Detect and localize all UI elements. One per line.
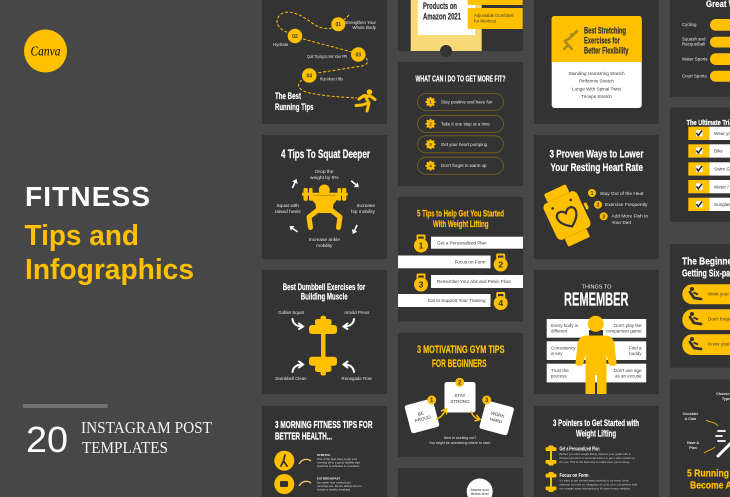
phone bbox=[411, 0, 482, 51]
step 02: 02 bbox=[292, 34, 298, 40]
panel title bbox=[275, 91, 314, 113]
pill 1: 1 bbox=[429, 100, 432, 105]
panel: triathlon checklist bbox=[670, 108, 730, 222]
card: stay strong: STAY bbox=[454, 393, 466, 398]
title bbox=[283, 282, 365, 302]
pill 2 bbox=[418, 115, 504, 132]
product tags: Adjustable Dumbbell bbox=[474, 13, 513, 18]
step labels: Strengthen Your bbox=[344, 20, 377, 25]
pill 3: Get your heart pumping bbox=[441, 142, 488, 147]
heading: Tips and Infographics bbox=[24, 220, 194, 286]
icon: Canva logo bbox=[24, 30, 67, 72]
step labels: Quit Trying to Set Your PR bbox=[307, 54, 347, 59]
labels bbox=[683, 392, 730, 450]
row 3 bbox=[414, 274, 523, 292]
number badges: 2 bbox=[458, 380, 462, 386]
labels: mobility bbox=[316, 243, 333, 249]
pointer 1: for you. This is the best way to make sure you're doing bbox=[560, 460, 630, 464]
labels: Racquetball bbox=[682, 42, 705, 46]
dashed route bbox=[277, 12, 368, 98]
row text: Don't use age bbox=[614, 368, 642, 373]
card: work hard bbox=[479, 400, 514, 436]
labels: raised heels bbox=[275, 209, 301, 215]
number badges: 1 bbox=[430, 398, 434, 404]
pointer 2: It's easy to get carried away wanting to try every funky bbox=[560, 478, 629, 482]
tip text: No matter how rushed your bbox=[317, 480, 351, 484]
title bbox=[423, 1, 461, 22]
title: Building Muscle bbox=[301, 292, 348, 302]
tip text: STRETCH bbox=[317, 453, 330, 457]
icon: standing person bbox=[576, 316, 616, 394]
list items: 2 bbox=[596, 203, 600, 209]
pill 3: Know your bbox=[708, 342, 730, 346]
arrows bbox=[288, 178, 361, 235]
card: stay strong: STRONG bbox=[450, 399, 470, 404]
title: Your Resting Heart Rate bbox=[550, 162, 643, 174]
labels: Increase ankle bbox=[309, 237, 340, 243]
pill 1 bbox=[418, 94, 504, 110]
pill 4: Don't forget to warm up bbox=[441, 163, 487, 168]
card: be proud: BE bbox=[417, 411, 424, 417]
text: Instagram post templates: INSTAGRAM POST bbox=[81, 418, 212, 437]
icon: Canva logo: Canva bbox=[30, 44, 61, 58]
labels bbox=[682, 22, 708, 78]
icon: stretching figure bbox=[564, 31, 577, 49]
white rows bbox=[547, 319, 646, 382]
panel: amazon products bbox=[398, 0, 523, 57]
panel: five running tips bbox=[670, 379, 730, 497]
panel: things to remember bbox=[534, 270, 658, 394]
card title bbox=[584, 26, 628, 56]
tip text: morning off to a good, healthy start bbox=[317, 460, 360, 464]
panel: morning fitness tips bbox=[262, 406, 387, 497]
card: work hard: WORK bbox=[490, 410, 505, 419]
heading: Tips and Infographics: Tips and bbox=[24, 220, 139, 252]
row text: different bbox=[551, 328, 568, 334]
labels: Water Sports bbox=[682, 56, 708, 62]
icon: smartwatch with heart bbox=[538, 179, 600, 250]
row text: comparison game bbox=[606, 328, 642, 334]
row text: Every body is bbox=[551, 323, 579, 328]
icon: speed lines and shoe bbox=[716, 431, 730, 456]
panel: best running tips bbox=[262, 0, 387, 124]
pointer 1: Before you start weight lifting, discuss your goals with a bbox=[560, 452, 631, 456]
title: 3 Proven Ways to Lower bbox=[550, 148, 644, 160]
title: Weight Lifting bbox=[576, 428, 616, 440]
title bbox=[564, 284, 628, 310]
row 3: 3 bbox=[419, 280, 424, 290]
tip text: mornings are, there's always time to bbox=[317, 484, 362, 488]
labels: Goblet Squat bbox=[278, 310, 305, 315]
panel: assess fitness bbox=[398, 468, 523, 497]
card body bbox=[552, 16, 642, 108]
white circle step: Assess your bbox=[470, 488, 490, 492]
list: Piriformis Stretch bbox=[579, 78, 614, 84]
title: Best Dumbbell Exercises for bbox=[283, 282, 365, 293]
white circle step bbox=[467, 478, 493, 497]
labels: Have A bbox=[687, 441, 699, 445]
labels bbox=[275, 169, 376, 249]
row 1: 1 bbox=[419, 240, 424, 250]
labels: Plan bbox=[689, 446, 697, 450]
pill 4 bbox=[418, 157, 504, 174]
title: FOR BEGINNERS bbox=[432, 358, 486, 370]
dashed arrows bbox=[704, 420, 718, 453]
panel: weight lifting tips bbox=[398, 197, 523, 322]
labels: Consider bbox=[683, 412, 699, 416]
list items: Exercise Frequently bbox=[605, 202, 648, 208]
number badges: 3 bbox=[485, 398, 489, 404]
card header bbox=[552, 16, 642, 62]
tip text: would be to schedule in a workout. bbox=[317, 464, 360, 468]
title: 3 MOTIVATING GYM TIPS bbox=[417, 344, 504, 356]
pointer 1: fitness instructor or personal trainer to get a plan written up bbox=[560, 456, 635, 460]
icon: dumbbell bbox=[309, 316, 337, 376]
title: 4 Tips To Squat Deeper bbox=[281, 149, 370, 161]
number badges bbox=[427, 378, 491, 404]
pill 1: Stay positive and have fun bbox=[441, 100, 493, 105]
title: 3 Pointers to Get Started with bbox=[553, 418, 639, 429]
labels: Drop the bbox=[315, 169, 334, 175]
row 2: Bike bbox=[714, 148, 723, 154]
title: 3 MORNING FITNESS TIPS FOR bbox=[275, 419, 373, 431]
row 3: Remember Your Abs and Pelvic Floor bbox=[437, 279, 511, 284]
divider bar bbox=[22, 404, 108, 408]
title bbox=[550, 148, 644, 174]
step labels: Whole Body bbox=[352, 25, 377, 30]
list items: Add More Fish to bbox=[612, 214, 648, 220]
pointer 2: exercise you see on Instagram or to let your competitive side bbox=[560, 482, 638, 486]
title: THINGS TO bbox=[582, 284, 612, 290]
caption: You might be wondering where to start. bbox=[429, 441, 491, 445]
step 01: 01 bbox=[336, 22, 341, 28]
caption: New to working out? bbox=[444, 436, 476, 440]
step labels bbox=[273, 20, 377, 82]
tip icons bbox=[274, 451, 294, 494]
title: 5 Tips to Help Get You Started bbox=[417, 208, 504, 220]
title: REMEMBER bbox=[564, 290, 628, 310]
row 2: 2 bbox=[498, 260, 503, 270]
labels bbox=[275, 310, 373, 381]
title: Amazon 2021 bbox=[423, 12, 461, 22]
phone screen bbox=[418, 0, 475, 35]
step labels: Run More Hills bbox=[320, 76, 344, 82]
panel: great workouts bbox=[670, 0, 730, 97]
list bbox=[568, 71, 625, 99]
row text: Consistency bbox=[551, 346, 576, 350]
card title: Better Flexibility bbox=[584, 46, 628, 56]
title: BETTER HEALTH... bbox=[275, 430, 332, 442]
labels: Arnold Press bbox=[344, 310, 370, 315]
step 03: 03 bbox=[356, 52, 361, 58]
tip text: One of the best ways to get your bbox=[317, 457, 357, 461]
pointer 2 bbox=[560, 473, 638, 490]
panel: six-pack guide bbox=[670, 244, 730, 368]
pill 3: 3 bbox=[429, 142, 432, 147]
row 2: Focus on Form bbox=[455, 260, 486, 264]
labels: Increase bbox=[357, 203, 375, 209]
row 4 bbox=[398, 292, 508, 310]
panel: squat bbox=[262, 135, 387, 259]
card: be proud bbox=[404, 398, 440, 434]
pill 2: Take it one step at a time bbox=[441, 121, 490, 126]
number: 20: 20 bbox=[26, 419, 68, 460]
list: Triceps Stretch bbox=[581, 94, 612, 99]
labels: Squat with bbox=[276, 203, 299, 209]
title: WHAT CAN I DO TO GET MORE FIT? bbox=[416, 74, 506, 84]
list items bbox=[588, 189, 648, 226]
row 2 bbox=[398, 254, 508, 272]
tip text: EAT BREAKFAST bbox=[317, 476, 341, 480]
curved arrows bbox=[299, 459, 311, 486]
labels: Dumbbell Clean bbox=[275, 376, 307, 381]
card: stay strong bbox=[444, 382, 476, 412]
row text: Find a bbox=[629, 346, 642, 350]
row text bbox=[551, 323, 642, 378]
product tags: for Workout bbox=[474, 18, 497, 24]
title bbox=[417, 208, 504, 230]
labels: Renegade Row bbox=[342, 376, 373, 381]
labels: Cycling bbox=[682, 22, 697, 27]
row text: is key bbox=[551, 351, 563, 356]
panel: resting heart rate bbox=[534, 135, 658, 259]
labels: hip mobility bbox=[351, 209, 376, 215]
heading: FITNESS: FITNESS bbox=[25, 181, 150, 212]
title bbox=[553, 418, 639, 440]
step 04: 04 bbox=[307, 73, 312, 79]
list items: 1 bbox=[590, 191, 594, 197]
labels: A Club bbox=[685, 417, 697, 421]
labels: weight by 5% bbox=[310, 175, 339, 181]
panel title: The Best bbox=[275, 91, 302, 102]
list items: Stay Out of the Heat bbox=[600, 191, 644, 197]
row text: Don't play the bbox=[614, 323, 642, 328]
arrows bbox=[436, 409, 480, 421]
labels: Type bbox=[722, 397, 730, 401]
list: Standing Hamstring Stretch bbox=[568, 71, 625, 76]
icon: runner bbox=[356, 89, 375, 111]
title: Products on bbox=[423, 1, 457, 11]
product tags bbox=[468, 0, 523, 29]
card title: Best Stretching bbox=[584, 26, 626, 36]
row text: Trust the bbox=[551, 368, 569, 373]
row 1: Get a Personalized Plan bbox=[437, 240, 487, 245]
yellow pills bbox=[710, 19, 730, 82]
text: Instagram post templates: TEMPLATES bbox=[82, 438, 168, 457]
panel: motivating gym tips bbox=[398, 333, 523, 457]
list: Lunge With Spinal Twist bbox=[572, 86, 622, 92]
icon: squat figure bbox=[302, 184, 348, 228]
pill 4: 4 bbox=[429, 163, 432, 168]
tip text bbox=[317, 453, 362, 492]
phone button bbox=[440, 45, 452, 57]
title bbox=[417, 344, 504, 370]
text: Instagram post templates bbox=[81, 418, 212, 457]
panel: dumbbell exercises bbox=[262, 270, 387, 394]
row text: buddy bbox=[629, 351, 642, 356]
row text: process bbox=[551, 374, 568, 378]
row 1 bbox=[414, 234, 523, 252]
pointer 1 bbox=[560, 446, 635, 464]
title bbox=[687, 469, 730, 492]
pointer 1: Get a Personalized Plan bbox=[560, 446, 600, 452]
title bbox=[682, 256, 730, 280]
caption bbox=[429, 436, 491, 445]
dark gaps behind figure bbox=[589, 330, 603, 338]
card: be proud: PROUD bbox=[414, 414, 432, 423]
list items: Your Diet bbox=[612, 220, 632, 226]
list items: 3 bbox=[602, 214, 605, 220]
panel: stretching bbox=[534, 0, 658, 124]
row 4: 4 bbox=[498, 298, 503, 308]
icons: dumbbells bbox=[546, 446, 556, 492]
pointer 2: Focus on Form bbox=[560, 473, 589, 479]
row 4: Eat to Support Your Training bbox=[428, 298, 486, 303]
labels: Squash and bbox=[682, 36, 706, 42]
panel: get more fit bbox=[398, 62, 523, 186]
row text: as an excuse bbox=[615, 374, 642, 378]
card title: Exercises for bbox=[584, 36, 620, 46]
step labels: Hydrate bbox=[273, 42, 289, 47]
panel: pointers for weight lifting bbox=[534, 406, 658, 497]
card: work hard: HARD bbox=[489, 416, 504, 425]
tip text: include a healthy breakfast. bbox=[317, 488, 351, 492]
labels: Court Sports bbox=[682, 74, 707, 78]
panel title: Running Tips bbox=[275, 102, 314, 113]
title: With Weight Lifting bbox=[433, 219, 489, 230]
pill 2: 2 bbox=[429, 122, 432, 126]
heading: Tips and Infographics: Infographics bbox=[25, 254, 194, 286]
pill 3 bbox=[418, 136, 504, 153]
arrows bbox=[292, 319, 354, 372]
pointer 2: run straight away attempting to lift super heavy weights. bbox=[560, 486, 631, 490]
white circle step: fitness level bbox=[471, 492, 489, 496]
title bbox=[275, 419, 373, 442]
